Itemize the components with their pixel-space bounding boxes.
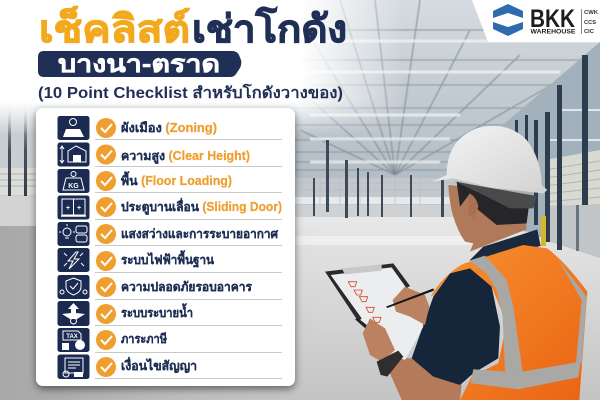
title: เช่าโกดัง (192, 6, 347, 51)
row 3: floor loading (58, 169, 282, 193)
neck and head (448, 182, 530, 252)
icon: sliding door (58, 196, 90, 220)
pen (386, 288, 434, 308)
row 2: clear height: ความสูง (Clear Height) (121, 149, 250, 164)
row 8: drainage: ระบบระบายน้ำ (121, 303, 193, 320)
title (39, 6, 347, 51)
icon: bulb and fans (58, 222, 90, 246)
row 9: tax (58, 328, 282, 353)
left wall behind panel (0, 100, 320, 400)
subtitle: (10 Point Checklist สำหรับโกดังวางของ) (38, 83, 343, 102)
writing hand (393, 287, 429, 325)
title: เช็คลิสต์ (39, 6, 190, 51)
icon: tax document (58, 328, 90, 352)
icon: security shield (58, 275, 90, 299)
row 5: lighting and ventilation: แสงสว่างและการระบายอากาศ (121, 227, 279, 241)
row 4: sliding door: ประตูบานเลื่อน (Sliding Door) (121, 198, 282, 215)
icon: sliding door: + (66, 205, 70, 212)
logo: BKK Warehouse: CCS (584, 20, 597, 26)
hard hat (432, 126, 547, 208)
right wall (497, 42, 600, 258)
logo: BKK Warehouse: CWK (584, 10, 598, 16)
wristwatch (377, 351, 403, 377)
logo: BKK Warehouse (472, 0, 600, 42)
icon: zoning map (58, 116, 90, 140)
logo: BKK Warehouse: CIC (584, 29, 594, 35)
logo: BKK Warehouse: BKK (530, 5, 575, 33)
checklist panel (36, 108, 295, 386)
row 2: clear height (58, 142, 282, 167)
worker with clipboard (325, 126, 587, 400)
row 3: floor loading: พื้น (Floor Loading) (121, 171, 232, 188)
back forearm (388, 358, 462, 400)
row 7: safety (58, 275, 282, 300)
safety vest (431, 245, 587, 400)
icon: lightning bolt (58, 248, 90, 272)
icon: KG weight (58, 169, 90, 193)
icon: drainage (58, 301, 90, 326)
icon: tax document: TAX (66, 334, 78, 340)
row 8: drainage (58, 301, 282, 326)
row 6: electricity: ระบบไฟฟ้าพื้นฐาน (121, 250, 214, 268)
row 1: zoning (58, 116, 282, 140)
logo: BKK Warehouse: WAREHOUSE (530, 28, 576, 36)
front hand (363, 318, 395, 362)
row 7: safety: ความปลอดภัยรอบอาคาร (121, 280, 252, 294)
row 10: contract terms: เงื่อนไขสัญญา (121, 357, 197, 373)
icon: KG weight: KG (68, 183, 79, 190)
row 5: lighting and ventilation (58, 222, 282, 246)
icon: building height (58, 142, 90, 166)
row 6: electricity (58, 248, 282, 273)
row 4: sliding door (58, 196, 282, 220)
clipboard (325, 263, 423, 360)
location pill: Bangna-Trad: บางนา-ตราด (58, 51, 220, 78)
row 10: contract terms (58, 354, 282, 379)
collar (469, 229, 541, 261)
icon: contract (58, 354, 90, 379)
icon: sliding door: + (77, 205, 81, 212)
shirt sleeve (412, 266, 500, 385)
row 1: zoning: ผังเมือง (Zoning) (121, 121, 217, 135)
location pill: Bangna-Trad (38, 51, 241, 78)
row 9: tax: ภาระภาษี (121, 332, 167, 346)
